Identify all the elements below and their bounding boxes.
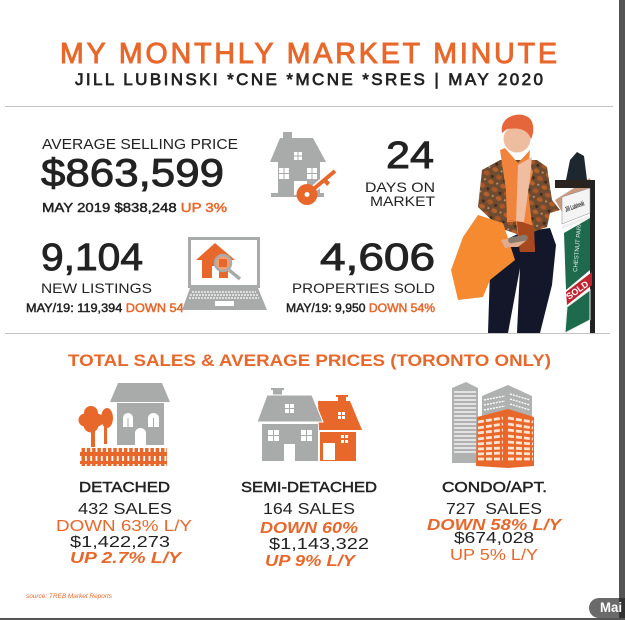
source note: source: TREB Market Reports: [26, 594, 112, 600]
icon: house with key: [270, 132, 335, 205]
stat: average selling price: [41, 137, 238, 215]
icon: condo towers: [452, 382, 534, 468]
label block: condo: DOWN 58% L/Y: [427, 517, 563, 534]
label block: detached: UP 2.7% L/Y: [70, 550, 183, 567]
label block: semi-detached: 164 SALES: [263, 501, 355, 518]
stat: new listings: [26, 237, 195, 315]
stat: properties sold: MAY/19: 9,950 DOWN 54%: [286, 303, 435, 315]
label block: semi-detached: UP 9% L/Y: [265, 553, 357, 570]
label block: detached: $1,422,273: [70, 534, 170, 551]
stat: days on market: [365, 135, 435, 209]
label block: condo: $674,028: [454, 530, 534, 547]
title: MY MONTHLY MARKET MINUTE: [60, 38, 557, 70]
icon: detached house: [78, 383, 170, 464]
stat: properties sold: PROPERTIES SOLD: [292, 280, 435, 296]
stat: new listings: 9,104: [41, 237, 143, 279]
label block: detached: 432 SALES: [78, 501, 172, 518]
stat: new listings: MAY/19: 119,394 DOWN 54%: [26, 303, 195, 315]
badge: Main: [589, 598, 625, 618]
stat: days on market: DAYS ON: [365, 179, 435, 195]
label block: semi-detached: SEMI-DETACHED: [241, 480, 377, 496]
photo: agent with sold sign: Jill Lubinski: [564, 200, 586, 214]
stat: properties sold: [286, 237, 435, 315]
label block: detached: [56, 480, 192, 567]
stat: average selling price: AVERAGE SELLING PRICE: [42, 137, 238, 153]
badge: Main: Mai: [600, 599, 622, 615]
photo: agent with sold sign: SOLD: [564, 279, 591, 302]
stat: average selling price: MAY 2019 $838,248 UP 3%: [42, 200, 227, 215]
label block: condo: 727 SALES: [446, 501, 542, 518]
label block: semi-detached: DOWN 60%: [260, 520, 358, 537]
label block: detached: DOWN 63% L/Y: [56, 518, 192, 535]
icon: laptop with house search: [182, 238, 267, 316]
icon: semi-detached houses: [257, 388, 362, 461]
label block: semi-detached: $1,143,322: [269, 536, 369, 553]
label block: detached: DETACHED: [79, 480, 170, 496]
section heading: TOTAL SALES & AVERAGE PRICES (TORONTO ONLY): [68, 352, 551, 370]
label block: condo: UP 5% L/Y: [450, 547, 538, 564]
label block: condo: CONDO/APT.: [442, 480, 547, 496]
photo: agent with sold sign: [451, 115, 595, 333]
label block: condo: [427, 480, 563, 564]
subtitle: JILL LUBINSKI *CNE *MCNE *SRES | MAY 2020: [75, 70, 543, 89]
photo: agent with sold sign: CHESTNUT PARK: [573, 222, 583, 272]
stat: average selling price: $863,599: [41, 152, 224, 195]
stat: days on market: 24: [386, 135, 434, 177]
stat: new listings: NEW LISTINGS: [41, 280, 152, 296]
stat: properties sold: 4,606: [320, 237, 435, 279]
label block: semi-detached: [241, 480, 377, 570]
stat: days on market: MARKET: [370, 193, 435, 209]
